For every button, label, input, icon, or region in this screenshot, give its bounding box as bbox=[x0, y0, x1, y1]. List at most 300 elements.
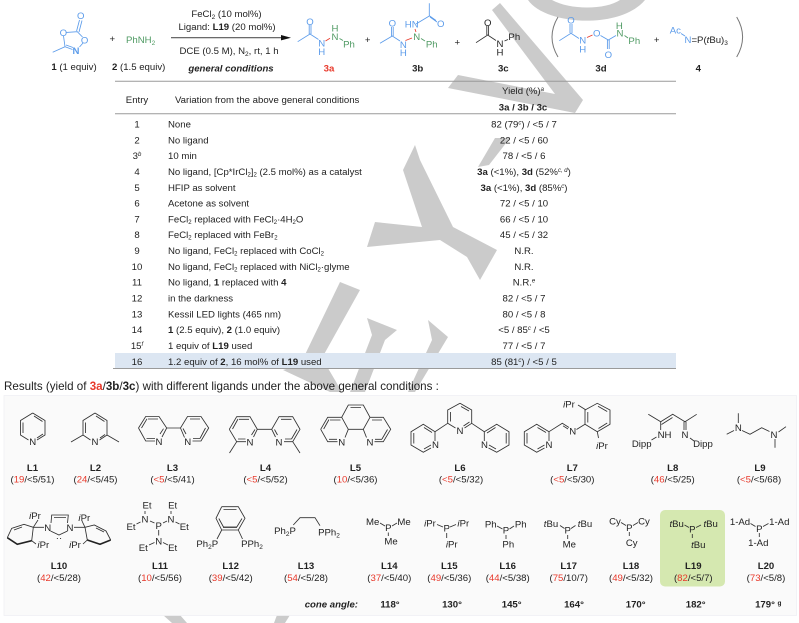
cone angle row: 164° bbox=[564, 600, 584, 610]
ligand L10: iPr bbox=[69, 540, 82, 551]
reactant 2: PhNH bbox=[126, 35, 152, 46]
row 11: e bbox=[532, 278, 536, 284]
ligand L13 bbox=[274, 518, 340, 584]
ligand L2 bbox=[71, 413, 119, 486]
ligand L13: (54/<5/28) bbox=[284, 573, 328, 584]
table rules bbox=[113, 81, 676, 368]
ligand L10: ·· bbox=[56, 533, 62, 544]
ligand L10: N bbox=[67, 523, 74, 534]
row 9: 9 bbox=[134, 246, 140, 257]
row 4 bbox=[134, 167, 571, 178]
row 4: No ligand, [Cp*IrCl bbox=[168, 167, 247, 178]
row 16 bbox=[132, 357, 557, 368]
ligand L11: Et bbox=[168, 543, 178, 554]
L19 highlight bbox=[660, 510, 725, 586]
table header bbox=[126, 86, 548, 114]
ligand L9: N bbox=[771, 430, 778, 441]
ligand L3 bbox=[138, 416, 209, 486]
row 10: 10 bbox=[132, 262, 142, 273]
ligand L7: iPr bbox=[563, 400, 576, 410]
reaction conditions: FeCl bbox=[191, 9, 212, 20]
plus: + bbox=[454, 38, 460, 48]
ligand L2: N bbox=[92, 437, 99, 448]
row 14: c bbox=[528, 326, 531, 332]
row 16: c bbox=[518, 358, 521, 364]
left parenthesis bbox=[552, 17, 558, 57]
row 14 bbox=[132, 325, 550, 336]
ligand L4: (<5/<5/52) bbox=[243, 474, 288, 486]
ligand L14: Me bbox=[366, 517, 379, 528]
product 3a: N bbox=[318, 38, 325, 50]
row 13: Kessil LED lights (465 nm) bbox=[168, 309, 281, 320]
ligand L4: L4 bbox=[260, 463, 272, 474]
ligand L19: L19 bbox=[685, 561, 702, 572]
row 11: N.R. bbox=[513, 277, 532, 288]
ligand L18: Cy bbox=[638, 516, 650, 528]
ligand L18: Cy bbox=[626, 538, 638, 549]
ligand L6 bbox=[411, 403, 509, 486]
row 9: 2 bbox=[321, 251, 325, 257]
ligand L2: (24/<5/45) bbox=[73, 474, 118, 486]
row 8: 2 bbox=[188, 235, 192, 241]
ligand L15: L15 bbox=[441, 561, 458, 572]
ligand L11: N bbox=[168, 514, 175, 526]
ligand L9 bbox=[727, 413, 786, 486]
product 3c: N bbox=[497, 39, 504, 50]
ligand L12: 2 bbox=[208, 544, 212, 551]
ligand L17: tBu bbox=[544, 519, 558, 530]
row 9: No ligand, FeCl bbox=[168, 246, 234, 257]
ligand L15: P bbox=[443, 524, 450, 534]
right parenthesis bbox=[737, 17, 743, 57]
row 10: 2 bbox=[317, 267, 321, 273]
row 2: No ligand bbox=[168, 135, 209, 146]
reaction conditions bbox=[178, 9, 279, 74]
product 3c: 3c bbox=[498, 64, 509, 74]
row 4: ] bbox=[251, 167, 253, 178]
row 1: None bbox=[168, 119, 191, 130]
product 3b: N bbox=[413, 32, 420, 43]
ligand L11: N bbox=[155, 536, 162, 548]
row 7: replaced with FeCl bbox=[192, 214, 274, 225]
ligand L12: PPh bbox=[241, 539, 259, 550]
row 10: ·glyme bbox=[321, 262, 350, 273]
row 15 bbox=[131, 341, 545, 352]
ligand L18: (49/<5/32) bbox=[609, 573, 653, 584]
ligand L15 bbox=[424, 518, 471, 584]
reactant 1: N bbox=[73, 46, 80, 57]
row 9: N.R. bbox=[514, 246, 534, 257]
cone angle row: 118° bbox=[380, 600, 400, 610]
row 14: 1 (2.5 equiv), 2 (1.0 equiv) bbox=[168, 325, 280, 336]
ligand L11: N bbox=[142, 514, 149, 526]
ligand L12: 2 bbox=[259, 544, 263, 551]
ligand L18: P bbox=[626, 523, 633, 534]
row 12 bbox=[132, 293, 545, 304]
ligand L20: L20 bbox=[758, 561, 774, 572]
arrow bbox=[171, 35, 291, 40]
row 1: 82 (79 bbox=[491, 119, 518, 130]
reactant 1: 1 (1 equiv) bbox=[51, 62, 97, 73]
ligand L4: N bbox=[276, 438, 283, 448]
reactant 2: 2 bbox=[152, 40, 156, 47]
reactant 1 bbox=[51, 11, 97, 73]
row 7: FeCl bbox=[168, 214, 188, 225]
side product 3d: H bbox=[616, 21, 623, 32]
product 3b bbox=[380, 3, 444, 74]
side product 3d: 3d bbox=[595, 64, 607, 74]
ligand L12: L12 bbox=[222, 561, 239, 572]
plus: + bbox=[654, 35, 660, 46]
ligand L17: Me bbox=[563, 540, 576, 550]
ligand L3: (<5/<5/41) bbox=[150, 474, 195, 486]
panel background bbox=[4, 396, 796, 616]
ligand L12: Ph bbox=[196, 539, 208, 550]
row 2: 2 bbox=[134, 135, 140, 146]
row 9: replaced with CoCl bbox=[237, 246, 321, 257]
ligand L19: P bbox=[689, 524, 696, 536]
side product 4: N=P(tBu) bbox=[684, 35, 724, 46]
row 8: 45 / <5 / 32 bbox=[500, 230, 548, 241]
plus: + bbox=[109, 34, 115, 45]
ligand L15: iPr bbox=[424, 518, 437, 530]
cone angle row: 130° bbox=[442, 600, 462, 610]
reaction conditions: DCE (0.5 M), N bbox=[179, 46, 245, 57]
ligand L13: P bbox=[289, 526, 296, 537]
ligand L14: L14 bbox=[381, 561, 398, 572]
row 5 bbox=[134, 183, 568, 194]
ligand L3: N bbox=[184, 437, 191, 448]
ligand L20: 1-Ad bbox=[730, 517, 750, 528]
row 3: 10 min bbox=[168, 151, 197, 162]
side product 4: Ac bbox=[670, 26, 681, 36]
row 13: 13 bbox=[132, 309, 142, 320]
row 4: (2.5 mol%) as a catalyst bbox=[257, 167, 362, 178]
row 8: FeCl bbox=[168, 230, 188, 241]
ligand L10: iPr bbox=[29, 511, 42, 522]
ligand L5: N bbox=[367, 438, 374, 448]
ligand L3: N bbox=[156, 437, 163, 448]
ligand L7: iPr bbox=[596, 441, 609, 452]
product 3b: O bbox=[389, 18, 396, 30]
row 5: HFIP as solvent bbox=[168, 183, 236, 194]
table header: Yield (%) bbox=[502, 86, 541, 97]
reaction scheme bbox=[51, 3, 743, 74]
reactant 1: O bbox=[81, 36, 88, 46]
row 12: 82 / <5 / 7 bbox=[503, 293, 545, 304]
row 2: 22 / <5 / 60 bbox=[500, 135, 548, 146]
table header: Variation from the above general conditions bbox=[175, 95, 360, 106]
ligand L14 bbox=[366, 517, 411, 584]
reactant 2: 2 (1.5 equiv) bbox=[112, 62, 165, 73]
ligand L18: Cy bbox=[609, 516, 621, 528]
ligand L17: (75/10/7) bbox=[549, 573, 588, 584]
ligand L17 bbox=[544, 519, 592, 584]
ligand L16: Ph bbox=[502, 540, 514, 550]
row 7: 2 bbox=[188, 220, 192, 226]
row 1: 1 bbox=[134, 119, 140, 130]
product 3c: H bbox=[497, 48, 504, 58]
reactant 1: O bbox=[77, 11, 84, 22]
ligand L13: Ph bbox=[274, 526, 286, 537]
reaction conditions: general conditions bbox=[187, 64, 274, 74]
product 3b: H bbox=[400, 48, 407, 59]
ligand L10 bbox=[7, 511, 111, 584]
ligand L5 bbox=[321, 405, 391, 486]
row 10: No ligand, FeCl bbox=[168, 262, 234, 273]
row 6: 6 bbox=[134, 198, 140, 209]
side product 3d: Ph bbox=[628, 36, 640, 47]
ligand L7: L7 bbox=[567, 463, 578, 474]
ligand L10: N bbox=[44, 523, 51, 534]
cone angle row: 179° bbox=[755, 600, 775, 610]
cone angle row: g bbox=[778, 600, 782, 607]
reactant 2 bbox=[112, 35, 165, 73]
ligand L11: Et bbox=[126, 522, 136, 533]
row 5: ) bbox=[564, 183, 568, 194]
reactant 1: O bbox=[60, 28, 67, 39]
product 3a: H bbox=[332, 24, 339, 34]
row 16: ) / <5 / 5 bbox=[521, 357, 557, 368]
row 14: 14 bbox=[132, 325, 143, 336]
ligand L5: N bbox=[338, 438, 345, 448]
row 5: c bbox=[561, 184, 564, 190]
ligand L1: N bbox=[29, 437, 36, 448]
ligand L19: tBu bbox=[669, 519, 684, 530]
row 2 bbox=[134, 135, 548, 146]
ligand L8: NH bbox=[658, 430, 671, 441]
side product 3d: O bbox=[605, 50, 612, 61]
row 6 bbox=[134, 198, 548, 209]
ligand L17: tBu bbox=[578, 519, 592, 530]
ligand L11 bbox=[126, 500, 189, 584]
ligand L6: N bbox=[481, 440, 488, 451]
side product 3d: H bbox=[579, 44, 586, 56]
ligand L16: P bbox=[503, 526, 509, 536]
ligand L14: Me bbox=[384, 536, 398, 548]
ligand L1: (19/<5/51) bbox=[10, 474, 55, 486]
row 1: ) / <5 / 7 bbox=[521, 119, 557, 130]
reaction conditions: 2 bbox=[212, 14, 216, 21]
row 10: N.R. bbox=[514, 262, 534, 273]
ligand L6: (<5/<5/32) bbox=[439, 474, 483, 486]
row 4: 3a (<1%), 3d (52% bbox=[477, 167, 558, 178]
ligand L11: Et bbox=[180, 522, 189, 533]
ligand L19 bbox=[669, 519, 718, 584]
table header: Entry bbox=[126, 95, 148, 106]
row 11 bbox=[132, 277, 536, 288]
ligand L10: iPr bbox=[78, 513, 91, 524]
ligand L3: L3 bbox=[167, 463, 178, 474]
product 3a: N bbox=[332, 32, 339, 43]
table header: 3a / 3b / 3c bbox=[499, 102, 548, 114]
row 8: replaced with FeBr bbox=[192, 230, 275, 241]
ligand L7: (<5/<5/30) bbox=[550, 474, 594, 486]
ligand L6: N bbox=[457, 426, 464, 437]
row 16: 16 bbox=[132, 357, 142, 368]
row 8 bbox=[134, 230, 548, 241]
row 1: c bbox=[518, 120, 521, 126]
ligand L8: Dipp bbox=[632, 439, 652, 450]
ligand L20: (73/<5/8) bbox=[747, 573, 785, 584]
ligand L6: N bbox=[432, 440, 439, 451]
row 14: <5 / 85 bbox=[498, 325, 528, 336]
row 12: 12 bbox=[132, 293, 142, 304]
cone angle row: 182° bbox=[686, 600, 706, 610]
ligand L1: L1 bbox=[27, 463, 39, 474]
panel: ligands bbox=[4, 396, 796, 616]
product 3c: O bbox=[484, 18, 491, 29]
ligand L12 bbox=[196, 507, 263, 584]
ligand L10: (42/<5/28) bbox=[37, 573, 81, 584]
ligand L15: (49/<5/36) bbox=[427, 573, 471, 584]
cone angle row: 170° bbox=[626, 600, 646, 610]
product 3a: Ph bbox=[343, 40, 355, 50]
ligand L4 bbox=[229, 417, 300, 486]
row 1 bbox=[134, 119, 557, 130]
ligand L8: Dipp bbox=[693, 439, 713, 450]
ligand L2: L2 bbox=[90, 463, 101, 474]
ligand L11: Et bbox=[168, 500, 178, 512]
table bbox=[113, 81, 676, 368]
row 3 bbox=[133, 151, 545, 162]
ligand L12: P bbox=[212, 539, 218, 550]
product 3c: Ph bbox=[508, 32, 520, 43]
row 5: 5 bbox=[134, 183, 140, 194]
side product 4: 4 bbox=[696, 64, 702, 74]
row 12: in the darkness bbox=[168, 293, 233, 304]
row 15: 15 bbox=[131, 341, 142, 352]
ligand L11: L11 bbox=[152, 561, 169, 572]
reaction conditions: Ligand: L19 (20 mol%) bbox=[178, 22, 276, 33]
product 3c bbox=[476, 18, 520, 74]
row 16: 1.2 equiv of 2, 16 mol% of L19 used bbox=[168, 357, 322, 368]
ligand L5: L5 bbox=[350, 463, 362, 474]
ligand L13: 2 bbox=[336, 532, 340, 540]
side product 3d: N bbox=[579, 36, 586, 46]
ligand L14: (37/<5/40) bbox=[367, 573, 411, 584]
ligand L19: tBu bbox=[691, 540, 706, 551]
row 4: 2 bbox=[253, 172, 257, 178]
row 7: 7 bbox=[134, 214, 140, 225]
ligand L13: PPh bbox=[318, 528, 336, 538]
highlighted row background bbox=[115, 353, 676, 368]
row 3: 3 bbox=[133, 151, 138, 162]
row 7 bbox=[134, 214, 548, 226]
ligand L10: L10 bbox=[51, 561, 67, 572]
row 6: 72 / <5 / 10 bbox=[500, 198, 548, 209]
ligand L13: L13 bbox=[298, 561, 314, 572]
row 9: 2 bbox=[234, 251, 238, 257]
row 4: 4 bbox=[134, 167, 140, 178]
ligand L15: iPr bbox=[446, 540, 458, 550]
ligand L19: tBu bbox=[703, 519, 718, 530]
ligand L16: Ph bbox=[485, 520, 497, 530]
product 3b: HN bbox=[405, 20, 419, 30]
row 7: ·4H bbox=[277, 214, 293, 225]
row 3: 78 / <5 / 6 bbox=[503, 151, 545, 162]
ligand L11: Et bbox=[142, 500, 152, 512]
row 15: f bbox=[142, 342, 144, 348]
ligand L7: N bbox=[546, 440, 553, 451]
ligand L8: N bbox=[682, 430, 689, 441]
row 11: 11 bbox=[132, 277, 142, 288]
row 13 bbox=[132, 309, 545, 320]
reaction conditions: (10 mol%) bbox=[215, 9, 262, 20]
ligand L7 bbox=[524, 400, 610, 486]
row 7: 2 bbox=[293, 220, 297, 226]
cone angle row bbox=[305, 600, 782, 610]
side product 3d: O bbox=[567, 16, 575, 26]
product 3b: 3b bbox=[412, 64, 423, 74]
product 3b: O bbox=[437, 19, 444, 30]
table header: a bbox=[541, 87, 545, 93]
reaction conditions: 2 bbox=[245, 51, 249, 58]
side product 3d bbox=[559, 16, 640, 74]
ligand L11: (10/<5/56) bbox=[138, 573, 182, 584]
ligand L14: Me bbox=[397, 517, 411, 528]
row 7: O bbox=[296, 214, 303, 225]
cone angle row: cone angle: bbox=[305, 600, 358, 610]
row 10: 2 bbox=[234, 267, 238, 273]
ligand L8: L8 bbox=[667, 463, 679, 474]
side product 4 bbox=[670, 26, 728, 74]
ligand L8: (46/<5/25) bbox=[651, 474, 695, 486]
reaction conditions: , rt, 1 h bbox=[249, 46, 279, 57]
row 11: No ligand, 1 replaced with 4 bbox=[168, 277, 287, 288]
ligand L20: 1-Ad bbox=[769, 517, 789, 528]
ligand L4: N bbox=[247, 438, 254, 448]
ligand L1 bbox=[10, 413, 55, 486]
side product 3d: O bbox=[593, 28, 600, 40]
ligand L8 bbox=[632, 414, 713, 486]
product 3a: H bbox=[318, 47, 325, 58]
ligand L14: P bbox=[385, 523, 392, 534]
ligand L15: iPr bbox=[457, 518, 470, 530]
ligand L19: (82/<5/7) bbox=[674, 573, 713, 584]
ligand L6: L6 bbox=[454, 463, 466, 474]
plus: + bbox=[365, 35, 371, 46]
ligand L12: (39/<5/42) bbox=[209, 573, 253, 584]
row 5: 3a (<1%), 3d (85% bbox=[480, 183, 561, 194]
row 14: / <5 bbox=[531, 325, 550, 336]
row 10: replaced with NiCl bbox=[237, 262, 317, 273]
ligand L9: L9 bbox=[754, 463, 766, 474]
row 9 bbox=[134, 246, 534, 257]
ligand L20: 1-Ad bbox=[748, 538, 768, 549]
ligand L9: N bbox=[735, 423, 742, 434]
ligand L20 bbox=[730, 517, 789, 584]
ligand L16: Ph bbox=[515, 520, 527, 530]
row 4: c, d bbox=[558, 168, 568, 174]
product 3a bbox=[298, 17, 355, 74]
product 3a: O bbox=[306, 17, 314, 28]
ligand L5: (10/<5/36) bbox=[333, 474, 378, 486]
cone angle row: 145° bbox=[502, 600, 522, 610]
ligand L11: Et bbox=[139, 543, 148, 554]
product 3b: N bbox=[400, 40, 407, 51]
row 15: 1 equiv of L19 used bbox=[168, 341, 252, 352]
side product 4: 3 bbox=[724, 40, 728, 47]
ligand L13: 2 bbox=[286, 531, 290, 538]
ligand L7: N bbox=[569, 426, 576, 438]
ligand L16: (44/<5/38) bbox=[486, 573, 530, 584]
results heading: Results (yield of 3a/3b/3c) with different ligands under the above general conditions : bbox=[4, 380, 439, 393]
ligand L16 bbox=[485, 520, 530, 584]
ligand L11: P bbox=[155, 521, 162, 532]
ligand L9: (<5/<5/68) bbox=[737, 474, 781, 486]
ligand L18: L18 bbox=[623, 561, 640, 572]
